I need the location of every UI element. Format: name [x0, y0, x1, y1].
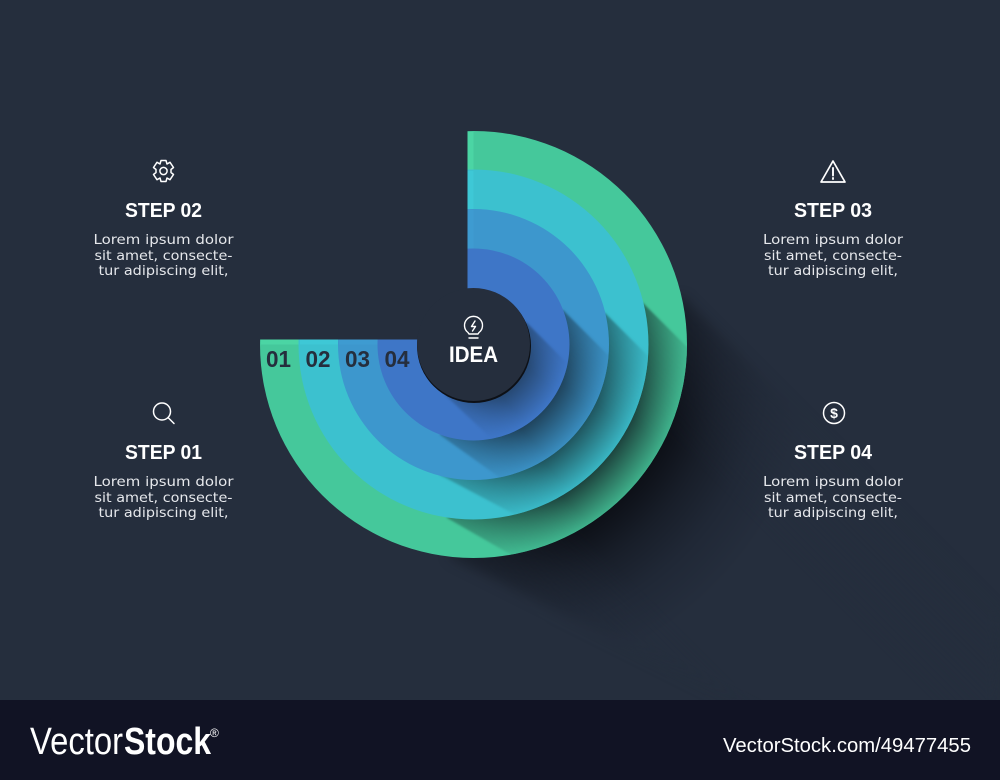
footer url: VectorStock.com/49477455: [723, 735, 971, 757]
number 04: 04: [384, 346, 410, 372]
heading: STEP 02: [125, 200, 202, 222]
icon: dollar coin: [824, 402, 844, 424]
text block: [94, 474, 234, 521]
text block: [763, 232, 903, 279]
text block: sit amet, consecte-: [94, 490, 233, 506]
panel: step 04: [763, 402, 903, 521]
icon: warning triangle: [821, 161, 845, 182]
text block: [94, 232, 234, 279]
text block: tur adipiscing elit,: [98, 263, 228, 279]
heading: STEP 01: [125, 442, 202, 464]
text block: sit amet, consecte-: [764, 248, 902, 264]
ring 01 green: [260, 131, 687, 558]
icon: dollar coin: $: [830, 405, 838, 421]
long shadow behind the chart: [454, 299, 743, 606]
ring 02 cyan: [298, 170, 648, 520]
footer logo: Stock: [124, 721, 212, 763]
text block: sit amet, consecte-: [764, 490, 902, 506]
text block: Lorem ipsum dolor: [94, 474, 234, 490]
panel: step 03: [763, 161, 903, 279]
centre circle: [417, 288, 531, 403]
icon: gear: [154, 160, 174, 182]
centre label IDEA: IDEA: [449, 342, 498, 367]
panel: step 02: [94, 160, 234, 279]
text block: sit amet, consecte-: [94, 248, 233, 264]
footer logo: Vector: [30, 721, 123, 763]
text block: tur adipiscing elit,: [98, 505, 228, 521]
text block: Lorem ipsum dolor: [763, 232, 903, 248]
footer logo: [30, 721, 219, 763]
footer bar: [0, 700, 1000, 780]
number 01: 01: [266, 346, 291, 372]
text block: tur adipiscing elit,: [768, 505, 898, 521]
icon: magnifier: [154, 403, 174, 424]
footer logo: ®: [210, 726, 219, 740]
heading: STEP 03: [794, 200, 872, 222]
chart: concentric ring sectors: [260, 131, 687, 558]
number 03: 03: [345, 346, 370, 372]
ring 04 blue: [378, 248, 570, 440]
panel: step 01: [94, 403, 234, 521]
icon: light bulb: [464, 316, 482, 338]
number 02: 02: [306, 346, 330, 372]
heading: STEP 04: [794, 442, 873, 464]
ring 03 mid blue: [338, 209, 609, 480]
text block: tur adipiscing elit,: [768, 263, 898, 279]
text block: Lorem ipsum dolor: [94, 232, 234, 248]
text block: [763, 474, 903, 521]
text block: Lorem ipsum dolor: [763, 474, 903, 490]
